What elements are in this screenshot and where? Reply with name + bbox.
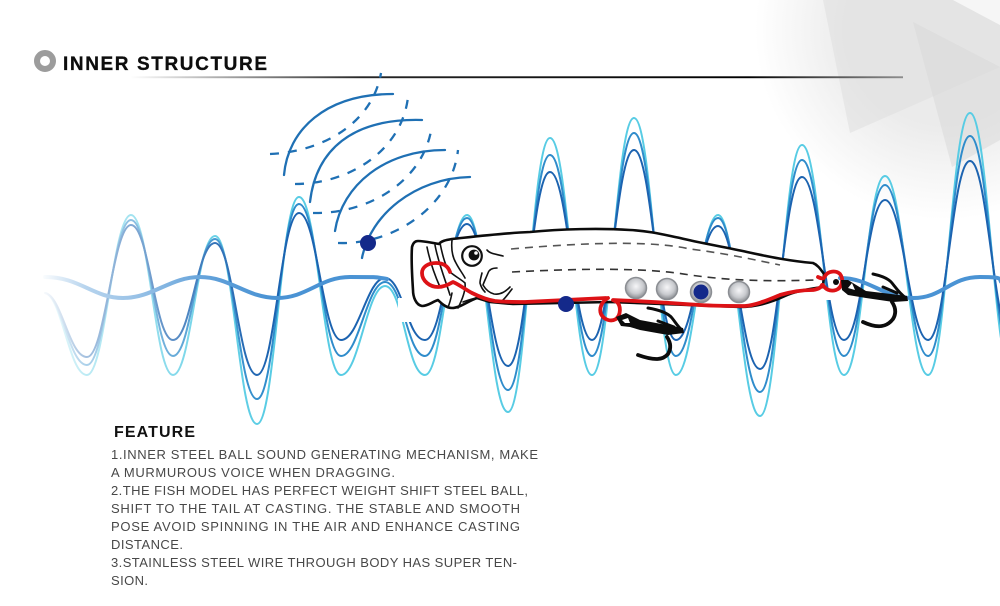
feature text: 2.THE FISH MODEL HAS PERFECT WEIGHT SHIFT STEEL BALL, (111, 483, 528, 498)
feature text: SHIFT TO THE TAIL AT CASTING. THE STABLE AND SMOOTH (111, 501, 520, 516)
wave gap beside the tail loop (824, 288, 842, 300)
feature text (111, 447, 538, 588)
feature text: 1.INNER STEEL BALL SOUND GENERATING MECHANISM, MAKE (111, 447, 538, 462)
feature text: 3.STAINLESS STEEL WIRE THROUGH BODY HAS SUPER TEN- (111, 555, 517, 570)
eye (462, 246, 482, 266)
treble hook: tail (833, 274, 908, 326)
title: INNER STRUCTURE (63, 54, 267, 75)
lure (412, 229, 842, 320)
steel balls (626, 278, 750, 302)
solid arcs (284, 94, 470, 258)
feature text: DISTANCE. (111, 537, 183, 552)
blue marker: steel ball (694, 284, 708, 300)
internal dashed lines (511, 243, 815, 281)
heading rule (130, 76, 903, 78)
feature text: SION. (111, 573, 148, 588)
wave gap beside the lure (398, 298, 414, 322)
dashed arcs (270, 73, 458, 243)
wave: thick centre line right (840, 277, 1000, 298)
wave: thick centre line left (45, 277, 387, 298)
wave: outer light cyan (45, 113, 1000, 424)
background: grey corner shapes (740, 0, 1000, 230)
blue marker: wire (558, 296, 574, 312)
mouth and gill lines (427, 240, 512, 308)
red steel wire (422, 263, 842, 320)
feature text: POSE AVOID SPINNING IN THE AIR AND ENHANCE CASTING (111, 519, 520, 534)
treble hook: belly (616, 308, 684, 359)
sound wave chart (45, 113, 1000, 424)
lure body (412, 229, 824, 308)
blue marker: sound source (360, 235, 376, 251)
sound arcs (270, 73, 470, 258)
wave: middle blue (45, 133, 1000, 399)
feature text: A MURMUROUS VOICE WHEN DRAGGING. (111, 465, 395, 480)
feature heading: FEATURE (114, 424, 195, 441)
left fade of waves (0, 190, 270, 435)
icon: heading ring (37, 53, 53, 69)
wave: inner dark blue (45, 150, 1000, 375)
